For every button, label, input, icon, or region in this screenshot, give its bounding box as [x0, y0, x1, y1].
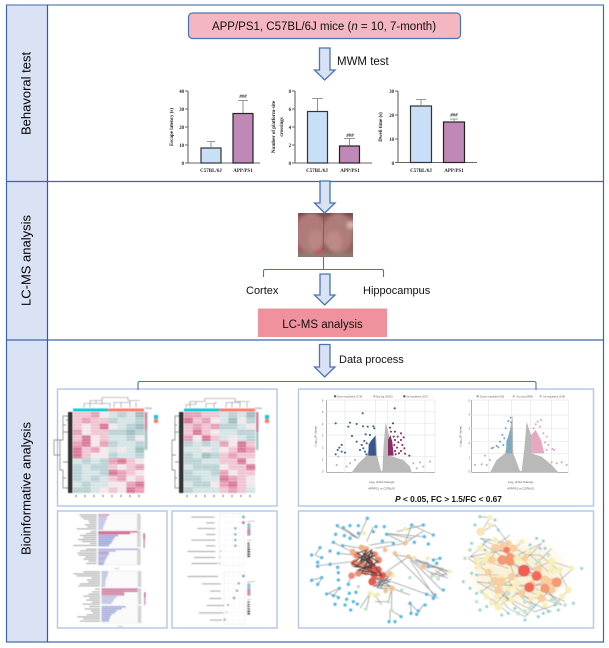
volcano plot 1: −Log₁₀ (P Value) [314, 426, 318, 448]
volcano plot 2: 0 [469, 469, 471, 473]
dot plot 2 [187, 572, 255, 624]
label: Data process: Data process [339, 354, 404, 366]
sidebar: Behavoral test: Behavoral test [18, 52, 34, 135]
volcano plot 2: Not sig (6399) [516, 394, 533, 398]
sidebar: LC-MS analysis: LC-MS analysis [18, 214, 34, 306]
volcano plot 1: APP/PS1 vs C57BL/6J [368, 486, 396, 490]
bar chart: platform-site crossings: C57BL/6J [306, 169, 328, 174]
bar chart: escape latency: C57BL/6J [200, 169, 222, 174]
panel: KEGG dot plots [172, 511, 277, 628]
label: MWM test: MWM test [337, 56, 390, 68]
bar chart: escape latency: ### [238, 95, 247, 100]
title box: mice: APP/PS1, C57BL/6J mice (n = 10, 7-month) [212, 21, 436, 33]
volcano plot 1: 1 [322, 458, 324, 462]
bar chart: platform-site crossings: 8 [289, 90, 292, 95]
bar chart: escape latency: 20 [179, 126, 185, 131]
label: Hippocampus: Hippocampus [363, 285, 431, 297]
volcano plot 2: 4 [469, 412, 471, 416]
bar chart: platform-site crossings: APP/PS1 [340, 169, 360, 174]
volcano plot 2: APP/PS1 vs C57BL/6J [507, 486, 535, 490]
GO chart 2: Count [117, 625, 123, 628]
volcano plot 1: Not sig (6532) [376, 394, 393, 398]
network 2 [462, 515, 583, 621]
volcano plot 1: 0 [322, 469, 324, 473]
bar chart: platform-site crossings: crossings [280, 117, 285, 137]
sidebar: Bioinformative analysis: Bioinformative analysis [18, 422, 34, 555]
volcano plot 1 [314, 394, 435, 490]
bar chart: dwell time: APP/PS1 [444, 169, 464, 174]
box: LC-MS analysis [258, 308, 387, 337]
bar chart: platform-site crossings: 0 [289, 162, 292, 167]
label: Cortex: Cortex [246, 285, 279, 297]
bar chart: platform-site crossings: 6 [289, 108, 292, 113]
volcano plot 1: 6 [322, 398, 324, 402]
brain photo [298, 213, 353, 257]
heatmap 2: Group [255, 407, 263, 410]
bar chart: platform-site crossings: ### [345, 134, 354, 139]
bar chart: dwell time: C57BL/6J [410, 169, 432, 174]
heatmap 1 [54, 398, 158, 497]
panel: PPI networks [298, 511, 594, 628]
panel: volcano plots [298, 389, 594, 506]
bar chart: dwell time: Dwell time (s) [379, 112, 384, 142]
bar chart: dwell time [379, 90, 477, 174]
bar chart: escape latency: 10 [179, 144, 185, 149]
dot plot 1 [187, 513, 255, 566]
bar chart: dwell time: 10 [389, 138, 395, 143]
bar chart: escape latency: 30 [179, 108, 185, 113]
bar chart: platform-site crossings: 4 [289, 126, 292, 131]
volcano plot 2: Down regulated (95) [480, 394, 504, 398]
bar chart: platform-site crossings: Number of platform-site [272, 100, 277, 153]
heatmap 1: Group [145, 407, 153, 410]
volcano plot 1: Log₂ (Fold change) [369, 480, 394, 484]
volcano plot 2: −Log₁₀ (P Value) [459, 426, 463, 448]
box: LC-MS analysis: LC-MS analysis [282, 319, 363, 331]
volcano plot 2 [459, 394, 568, 490]
volcano plot 1: Up regulated (157) [406, 394, 428, 398]
bar chart: dwell time: 0 [392, 162, 395, 167]
bar chart: dwell time: 30 [389, 90, 395, 95]
arrow: MWM test [314, 48, 335, 80]
GO chart 1: Count [114, 567, 120, 570]
bar chart: platform-site crossings [272, 90, 372, 174]
volcano plot 2: Up regulated (149) [543, 394, 565, 398]
volcano plot 2: 3 [469, 427, 471, 431]
bar chart: escape latency: 40 [179, 90, 185, 95]
bar chart: escape latency: 0 [182, 162, 185, 167]
arrow: to LC-MS [314, 274, 335, 305]
sidebar: LC-MS analysis [6, 181, 48, 340]
volcano plot 1: 4 [322, 422, 324, 426]
bracket: data process [138, 382, 536, 390]
title box: mice [188, 13, 460, 38]
arrow: to brain [314, 181, 335, 213]
bar chart: platform-site crossings: 2 [289, 144, 292, 149]
bracket: cortex / hippocampus [264, 257, 384, 277]
heatmap 2 [172, 398, 269, 497]
sidebar: Bioinformative analysis [6, 340, 48, 642]
volcano plot 2: 1 [469, 455, 471, 459]
bar chart: escape latency [170, 90, 260, 174]
panel: heatmaps [54, 389, 277, 506]
bar chart: escape latency: Escape latency (s) [170, 108, 175, 146]
volcano plot 1: Down regulated (178) [337, 394, 362, 398]
arrow: data process [314, 344, 335, 377]
network 1 [310, 517, 452, 623]
volcano plot 1: 3 [322, 434, 324, 438]
bar chart: dwell time: 20 [389, 114, 395, 119]
volcano plot 1: 2 [322, 446, 324, 450]
volcano plot 2: Log₂ (Fold change) [508, 480, 533, 484]
volcano plot 1: 5 [322, 410, 324, 414]
sidebar: Behavoral test [6, 5, 48, 181]
bar chart: escape latency: APP/PS1 [233, 169, 253, 174]
bar chart: dwell time: ### [449, 114, 458, 118]
volcano plot 2: 5 [469, 398, 471, 402]
panel: GO bar charts [58, 511, 167, 628]
threshold caption: P < 0.05, FC > 1.5/FC < 0.67 [395, 494, 502, 504]
volcano plot 2: 2 [469, 441, 471, 445]
